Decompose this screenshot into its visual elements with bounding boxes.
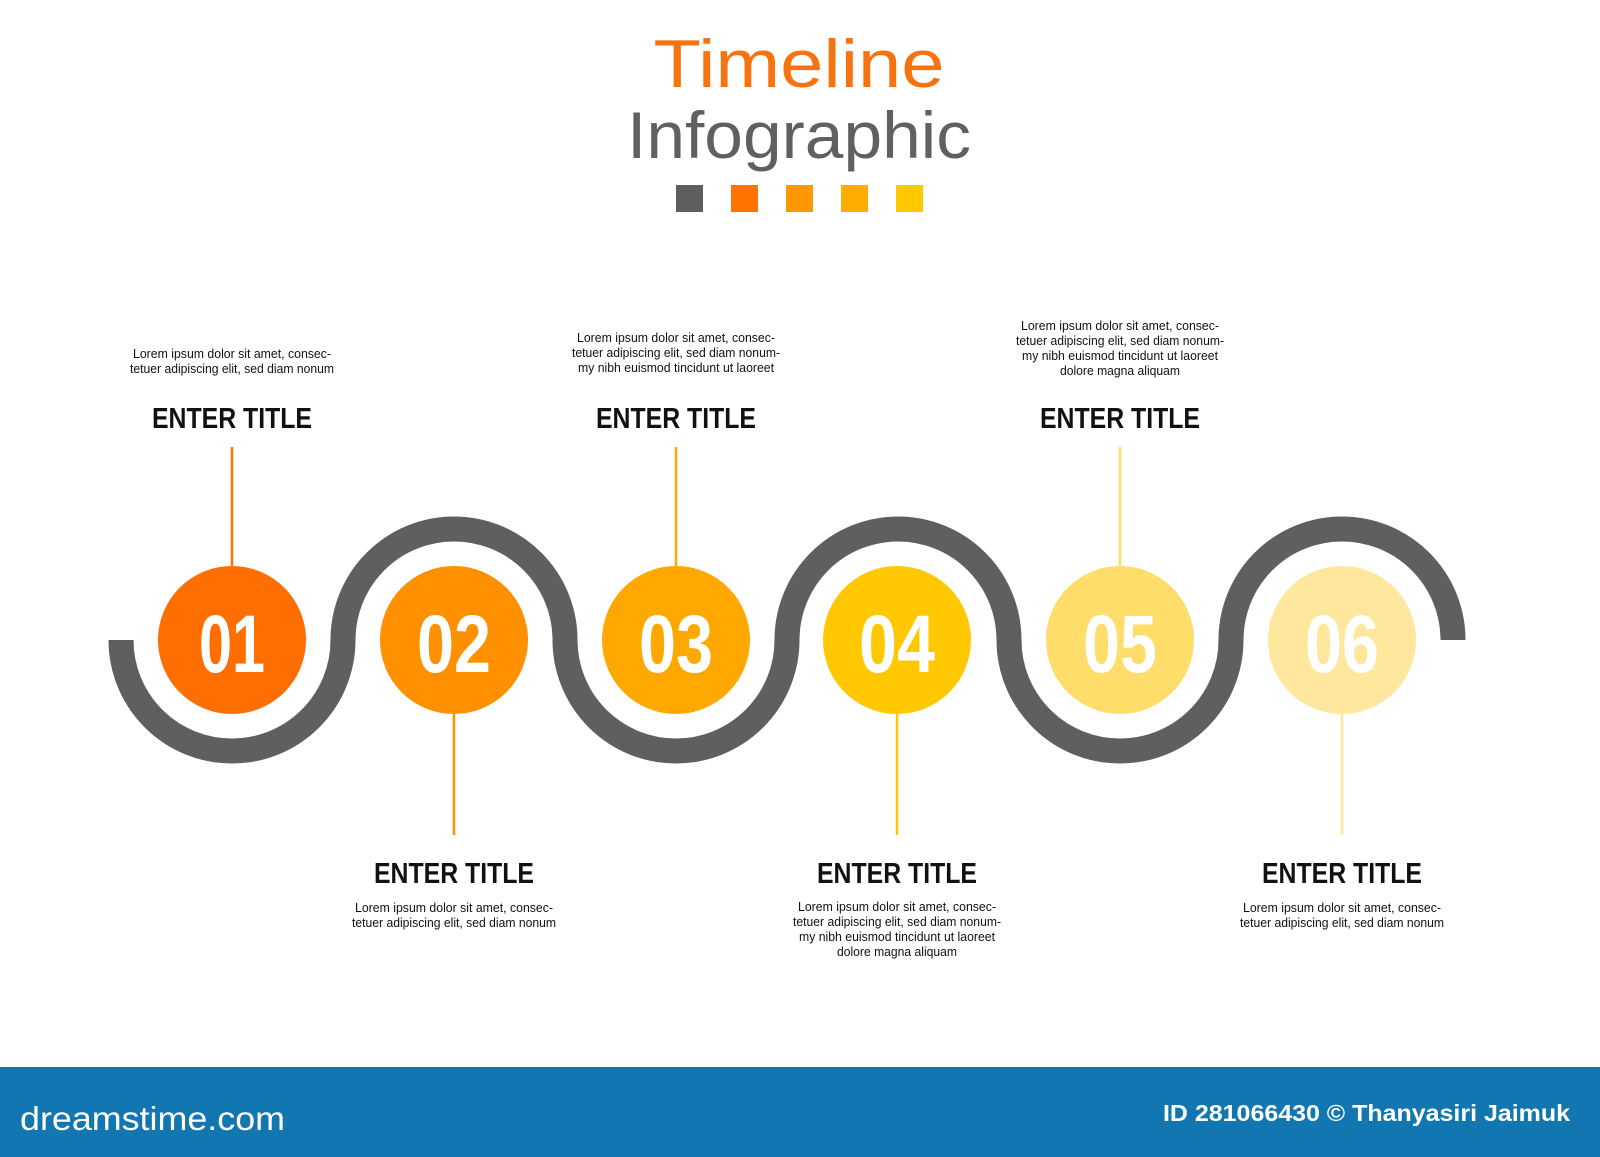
text block 06: ENTER TITLE [1262,858,1422,890]
text block 01: Lorem ipsum dolor sit amet, consec- [133,347,331,361]
text block 06: tetuer adipiscing elit, sed diam nonum [1240,916,1444,930]
text block 03: my nibh euismod tincidunt ut laoreet [578,361,775,375]
text block 02: ENTER TITLE [374,858,534,890]
text block 04: my nibh euismod tincidunt ut laoreet [799,930,996,944]
text block 04 [793,858,1001,959]
step 06 circle [1268,566,1416,714]
text block 02: Lorem ipsum dolor sit amet, consec- [355,901,553,915]
step 04 circle: 04 [859,599,935,690]
text block 03: ENTER TITLE [596,403,756,435]
text block 03 [572,331,780,435]
connector lines [232,447,1342,835]
step 04 circle [823,566,971,714]
text block 04: ENTER TITLE [817,858,977,890]
text block 05: Lorem ipsum dolor sit amet, consec- [1021,319,1219,333]
text block 03: tetuer adipiscing elit, sed diam nonum- [572,346,780,360]
text block 06: Lorem ipsum dolor sit amet, consec- [1243,901,1441,915]
step 02 circle [380,566,528,714]
step 05 circle: 05 [1083,599,1157,690]
wave path [121,529,1453,751]
step 05 circle [1046,566,1194,714]
text block 01: ENTER TITLE [152,403,312,435]
step 03 circle [602,566,750,714]
text block 01: tetuer adipiscing elit, sed diam nonum [130,362,334,376]
title: Timeline [654,26,944,102]
step 01 circle [158,566,306,714]
text block 05 [1016,319,1224,435]
text block 05: dolore magna aliquam [1060,364,1180,378]
title [627,26,971,172]
text block 03: Lorem ipsum dolor sit amet, consec- [577,331,775,345]
step 01 circle: 01 [199,599,265,690]
text block 01 [130,347,334,435]
text block 02 [352,858,556,930]
text block 02: tetuer adipiscing elit, sed diam nonum [352,916,556,930]
footer bar: ID 281066430 © Thanyasiri Jaimuk [1163,1100,1570,1126]
text block 04: tetuer adipiscing elit, sed diam nonum- [793,915,1001,929]
text block 04: dolore magna aliquam [837,945,957,959]
text block 05: my nibh euismod tincidunt ut laoreet [1022,349,1219,363]
step 02 circle: 02 [417,599,491,690]
text block 06 [1240,858,1444,930]
footer bar: dreamstime.com [20,1100,285,1137]
step 03 circle: 03 [639,599,713,690]
color squares [676,185,923,212]
footer bar [0,1067,1600,1157]
text block 05: ENTER TITLE [1040,403,1200,435]
step 06 circle: 06 [1305,599,1379,690]
text block 05: tetuer adipiscing elit, sed diam nonum- [1016,334,1224,348]
title: Infographic [627,98,971,172]
text block 04: Lorem ipsum dolor sit amet, consec- [798,900,996,914]
